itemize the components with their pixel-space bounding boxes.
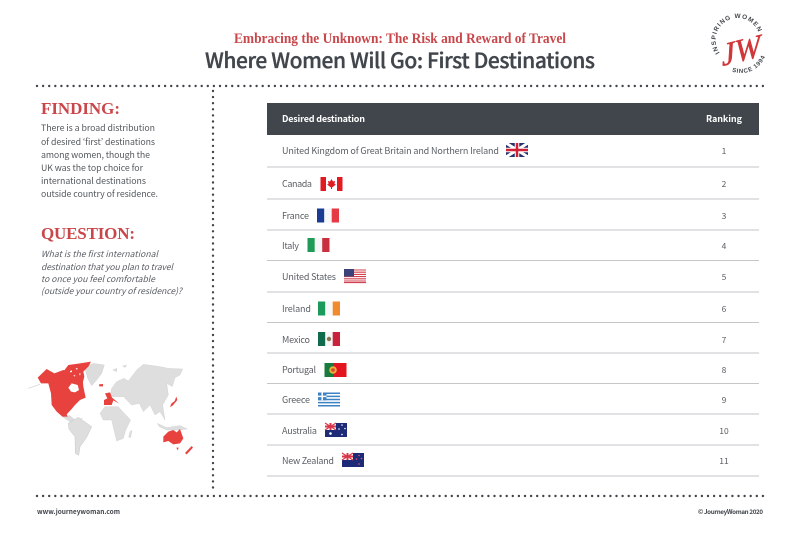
finding text: UK was the top choice for [41, 161, 144, 174]
row: Australia: Australia [282, 424, 317, 437]
row: Canada: Canada [282, 177, 312, 190]
row: New Zealand [282, 453, 729, 467]
row: Greece [282, 392, 727, 406]
logo: Inspiring Women badge [711, 14, 766, 73]
row: United States: 5 [722, 271, 727, 283]
row: New Zealand: New Zealand [282, 454, 334, 467]
row: Mexico [282, 332, 727, 346]
row: United States [282, 269, 727, 283]
table header: Desired destination [282, 112, 365, 125]
finding text: There is a broad distribution [41, 121, 155, 134]
finding text: among women, though the [41, 148, 150, 161]
row: Italy [282, 238, 727, 252]
row: Italy: Italy [282, 239, 299, 252]
logo: Inspiring Women badge: INSPIRING WOMEN [711, 14, 762, 55]
question text: (outside your country of residence)? [41, 285, 184, 297]
row: Australia [282, 423, 729, 437]
row: United Kingdom: 1 [722, 145, 727, 157]
row: United Kingdom: United Kingdom of Great Britain and Northern Ireland [282, 144, 499, 157]
row: Greece: Greece [282, 393, 310, 406]
title: Where Women Will Go: First Destinations [205, 45, 595, 75]
world map [28, 362, 193, 455]
row: Portugal: 8 [722, 364, 727, 376]
question text: destination that you plan to travel [41, 261, 175, 273]
heading: finding: FINDING: [41, 99, 120, 118]
heading: question: QUESTION: [41, 224, 135, 243]
finding text: of desired ‘first’ destinations [41, 135, 155, 148]
row: New Zealand: 11 [719, 455, 729, 467]
table header: Ranking [706, 112, 743, 125]
question text: What is the first international [41, 248, 160, 260]
finding text [41, 121, 158, 200]
row: France [282, 208, 727, 222]
eurasia, africa, oceania [100, 364, 193, 454]
panel: question [41, 224, 184, 297]
logo: Inspiring Women badge: JW [719, 26, 766, 73]
footer: copyright: © JourneyWoman 2020 [698, 507, 763, 516]
row: Canada: 2 [722, 178, 727, 190]
row: Italy: 4 [722, 240, 727, 252]
row: Ireland: 6 [722, 303, 727, 315]
finding text: international destinations [41, 174, 146, 187]
row: France: 3 [722, 210, 727, 222]
row: Ireland: Ireland [282, 302, 311, 315]
row: Portugal [282, 363, 727, 377]
row: United States: United States [282, 270, 336, 283]
row: Canada [282, 177, 727, 191]
question text [41, 248, 184, 297]
row: Mexico: Mexico [282, 333, 310, 346]
row: France: France [282, 209, 309, 222]
logo: Inspiring Women badge: SINCE 1994 [732, 56, 765, 73]
row: Australia: 10 [719, 425, 729, 437]
finding text: outside country of residence. [41, 187, 158, 200]
row: Mexico: 7 [722, 334, 727, 346]
panel: finding [41, 99, 158, 200]
row: Ireland [282, 302, 727, 316]
row: Greece: 9 [722, 394, 727, 406]
subtitle: Embracing the Unknown: The Risk and Reward of Travel [234, 31, 566, 47]
table header [267, 103, 759, 135]
row: Portugal: Portugal [282, 363, 316, 376]
footer: website: www.journeywoman.com [37, 506, 120, 516]
north america [28, 362, 104, 424]
question text: to once you feel comfortable [41, 273, 156, 285]
south america [68, 417, 92, 455]
row: United Kingdom [282, 143, 727, 157]
